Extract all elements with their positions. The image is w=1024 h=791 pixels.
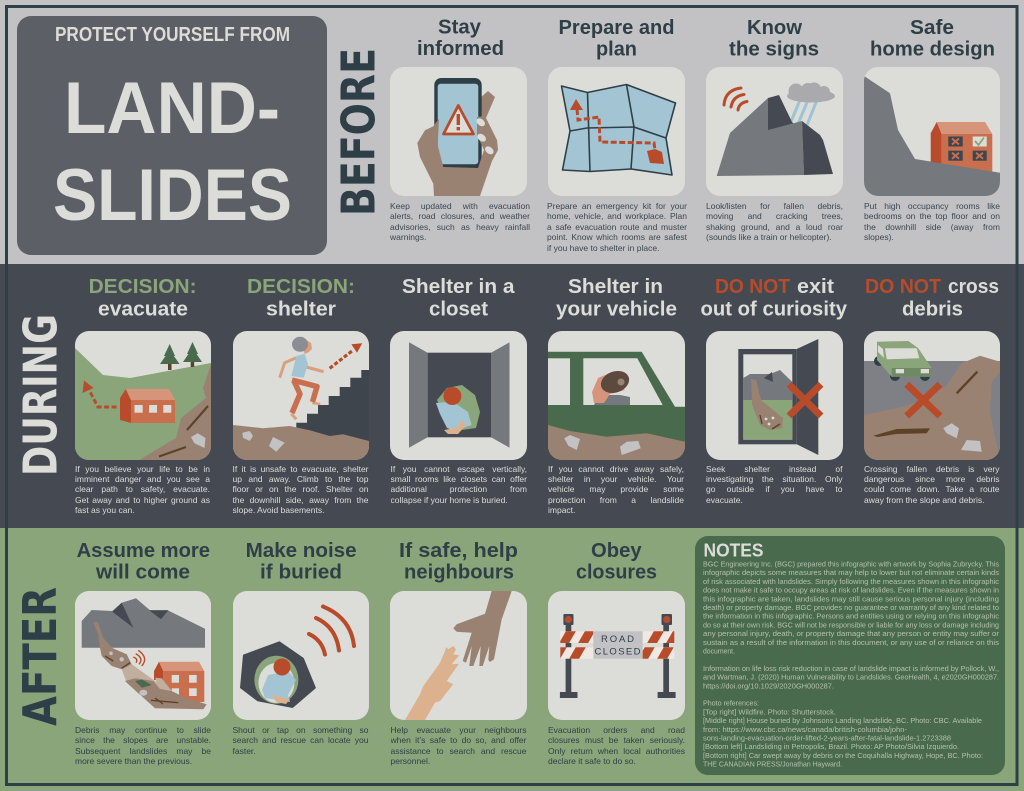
body text: imminent danger and you see a bbox=[75, 474, 210, 484]
heading: Assume more bbox=[77, 539, 210, 562]
icon: open door with crossed out debris view bbox=[706, 331, 843, 460]
heading: neighbours bbox=[404, 561, 514, 584]
body text: search and rescue can locate you bbox=[232, 735, 368, 745]
notes text: this infographic are taken, landslides may still cause serious personal injury (including bbox=[703, 594, 999, 603]
title block: LAND- bbox=[64, 68, 280, 149]
body text: collapse if your home is buried. bbox=[390, 495, 508, 505]
icon: road closed barricade: ROAD bbox=[601, 634, 634, 645]
heading bbox=[556, 275, 677, 320]
heading: DO NOT bbox=[715, 275, 790, 298]
section label: during: DURING bbox=[14, 314, 68, 476]
panel: after band bbox=[0, 528, 1024, 791]
body text: Prepare an emergency kit for your bbox=[547, 201, 687, 211]
icon: car stopped before debris with cross bbox=[864, 331, 1000, 460]
heading: debris bbox=[902, 298, 963, 320]
step: assume more will come bbox=[75, 539, 215, 775]
notes text: any personal injury, death, or property damage that any person or entity may suffer or bbox=[703, 629, 1000, 638]
body text bbox=[864, 464, 1004, 514]
step: safe home design bbox=[864, 16, 1004, 255]
body text: faster. bbox=[232, 746, 256, 756]
body text: more severe than the previous. bbox=[75, 756, 192, 766]
heading bbox=[402, 275, 515, 320]
body text: up and away. Climb to the top bbox=[232, 474, 368, 484]
body text: dangerous since more debris bbox=[864, 474, 1000, 484]
icon: hand holding phone with warning bbox=[390, 67, 527, 196]
heading: Make noise bbox=[246, 539, 357, 562]
heading: If safe, help bbox=[399, 539, 518, 562]
step: do not exit out of curiosity bbox=[700, 275, 848, 514]
body text: fast as you can. bbox=[75, 505, 135, 515]
body text: impact. bbox=[548, 505, 575, 515]
step: prepare and plan bbox=[547, 16, 687, 261]
notes text: death) or property damage. BGC provides no guarantee or warranty of any kind related to bbox=[703, 603, 999, 612]
body text: If you believe your life to be in bbox=[75, 464, 210, 474]
body text bbox=[75, 725, 215, 775]
title block: SLIDES bbox=[53, 155, 292, 236]
heading: will come bbox=[95, 561, 190, 584]
heading bbox=[77, 539, 210, 584]
body text bbox=[706, 464, 846, 514]
icon: person climbing stairs bbox=[233, 331, 369, 460]
body text: the downhill side (away from bbox=[864, 222, 1000, 232]
body text: declare it safe to do so. bbox=[548, 756, 636, 766]
heading: Shelter in a bbox=[402, 275, 515, 298]
body text: Keep updated with evacuation bbox=[390, 201, 530, 211]
body text: If you cannot drive away safely, bbox=[548, 464, 684, 474]
body text: Only return when local authorities bbox=[548, 746, 685, 756]
body text: (sounds like a train or helicopter). bbox=[706, 232, 832, 242]
body text: closures must be taken seriously. bbox=[548, 735, 685, 745]
panel: notes bbox=[695, 536, 1005, 775]
heading: evacuate bbox=[98, 298, 188, 320]
icon: house on slope bbox=[864, 67, 1000, 196]
step: decision shelter bbox=[232, 275, 372, 524]
notes text: BGC Engineering Inc. (BGC) prepared this infographic with artwork by Sophia Zubrycky. This bbox=[703, 560, 999, 568]
body text: Look/listen for fallen debris, bbox=[706, 201, 843, 211]
heading: Shelter in bbox=[568, 275, 663, 298]
section label: after: AFTER bbox=[13, 587, 67, 726]
body text bbox=[232, 464, 372, 524]
title block bbox=[17, 16, 327, 255]
body text: go outside if you have to bbox=[706, 484, 842, 494]
body text bbox=[232, 725, 372, 765]
notes text: sustain as a result of the information in this document, or any use of or reliance on this bbox=[703, 638, 999, 647]
body text: investigating the situation. Only bbox=[706, 474, 842, 484]
body text: away from the slope and debris. bbox=[864, 495, 984, 505]
body text: slope. Avoid basements. bbox=[232, 505, 324, 515]
body text: Help evacuate your neighbours bbox=[390, 725, 526, 735]
notes text: [Top right] Wildfire. Photo: Shutterstock. bbox=[703, 707, 836, 716]
step: do not cross debris bbox=[864, 275, 1004, 514]
heading: exit bbox=[797, 275, 834, 298]
notes text: the information in this infographic. Persons and entities using or relying on this infographic bbox=[703, 612, 999, 621]
heading: closet bbox=[429, 298, 488, 320]
notes text: document. bbox=[703, 646, 735, 656]
heading bbox=[246, 539, 357, 584]
step: make noise if buried bbox=[232, 539, 372, 765]
body text: Get away and to higher ground as bbox=[75, 495, 210, 505]
panel: during band bbox=[0, 264, 1024, 528]
body text bbox=[548, 725, 688, 775]
body text: could come down. Take a route bbox=[864, 484, 1000, 494]
notes text bbox=[703, 560, 1000, 769]
heading: if buried bbox=[260, 561, 342, 584]
body text bbox=[548, 464, 688, 524]
body text: the downhill side, away from the bbox=[232, 495, 368, 505]
notes text: of risk associated with landslides. Simply following the measures shown in this infographic bbox=[703, 577, 999, 586]
notes text: https://doi.org/10.1029/2020GH000287. bbox=[703, 681, 834, 690]
heading bbox=[576, 539, 657, 584]
section label: before: BEFORE bbox=[332, 48, 386, 216]
heading: Know bbox=[747, 16, 802, 39]
body text: evacuate. bbox=[706, 495, 743, 505]
notes text: and Wartman, J. (2020) Human Vulnerability to Landslides. GeoHealth, 4, e2020GH000287. bbox=[703, 673, 999, 682]
step: shelter in a closet bbox=[390, 275, 530, 514]
icon: mountain, rain cloud, sound arcs bbox=[706, 67, 843, 196]
heading bbox=[247, 275, 355, 320]
body text: small rooms like closets can offer bbox=[390, 474, 527, 484]
body text: personnel. bbox=[390, 756, 430, 766]
body text bbox=[390, 725, 530, 775]
heading bbox=[558, 16, 674, 60]
body text: additional protection from bbox=[390, 484, 527, 494]
body text: Debris may continue to slide bbox=[75, 725, 211, 735]
step: help neighbours bbox=[390, 539, 530, 775]
heading: DECISION: bbox=[247, 275, 355, 298]
heading: out of curiosity bbox=[700, 298, 848, 320]
notes text: from: https://www.cbc.ca/news/canada/british-columbia/john- bbox=[703, 725, 908, 734]
notes text: THE CANADIAN PRESS/Jonathan Hayward. bbox=[703, 760, 842, 769]
icon: folded map with route bbox=[548, 67, 685, 196]
icon: house, hill and evacuation arrow bbox=[75, 331, 211, 460]
heading bbox=[870, 16, 995, 60]
body text: If you cannot escape vertically, bbox=[390, 464, 527, 474]
body text bbox=[390, 464, 530, 514]
body text bbox=[864, 201, 1004, 255]
body text: moving and cracking trees, bbox=[706, 211, 843, 221]
icon: buried person and sound arcs bbox=[233, 591, 369, 720]
heading: the signs bbox=[729, 38, 819, 60]
icon: person crouched in vehicle bbox=[548, 331, 685, 460]
heading: shelter bbox=[266, 298, 336, 320]
heading: your vehicle bbox=[556, 298, 677, 320]
body text: protection from a landslide bbox=[548, 495, 684, 505]
title block: PROTECT YOURSELF FROM bbox=[55, 24, 290, 46]
notes text: [Bottom left] Landsliding in Petropolis, Brazil. Photo: AP Photo/Silvia Izquierdo. bbox=[703, 742, 959, 751]
heading: informed bbox=[417, 37, 504, 60]
step: decision evacuate bbox=[75, 275, 215, 524]
body text: point. Know which rooms are safest bbox=[547, 232, 687, 242]
body text: Evacuation orders and road bbox=[548, 725, 685, 735]
heading bbox=[417, 16, 504, 60]
body text: If it is unsafe to evacuate, shelter bbox=[232, 464, 368, 474]
heading bbox=[700, 275, 848, 320]
body text: alerts, road closures, and weather bbox=[390, 211, 530, 221]
notes text: [Bottom right] Car swept away by debris on the Coquihalla Highway, Hope, BC. Photo: bbox=[703, 751, 983, 760]
heading: Obey bbox=[591, 539, 642, 562]
heading: plan bbox=[596, 38, 637, 60]
body text: when it’s safe to do so, and offer bbox=[390, 735, 526, 745]
step: obey closures bbox=[548, 539, 688, 775]
body text: home, vehicle, and workplace. Plan bbox=[547, 211, 687, 221]
heading: DECISION: bbox=[89, 275, 197, 298]
step: stay informed bbox=[390, 16, 530, 255]
body text: vehicle may provide some bbox=[548, 484, 684, 494]
notes text: sons-landing-evacuation-order-lifted-2-years-after-fatal-landslide-1.2723388 bbox=[703, 734, 951, 742]
icon: two reaching hands bbox=[390, 591, 527, 720]
body text: since the slopes are unstable. bbox=[75, 735, 211, 745]
body text: if you have to shelter in place. bbox=[547, 243, 659, 253]
body text: warnings. bbox=[390, 232, 426, 242]
icon: road closed barricade bbox=[548, 591, 685, 720]
heading bbox=[729, 16, 819, 60]
heading bbox=[399, 539, 518, 584]
body text: slopes). bbox=[864, 232, 894, 242]
body text: Put high occupancy rooms like bbox=[864, 201, 1000, 211]
heading: Stay bbox=[438, 16, 482, 38]
heading: closures bbox=[576, 561, 657, 584]
body text bbox=[390, 201, 530, 255]
step: shelter in your vehicle bbox=[548, 275, 688, 524]
icon: mountain, landslide and house bbox=[75, 591, 211, 720]
body text: floor or on the roof. Shelter on bbox=[232, 484, 368, 494]
heading: DO NOT bbox=[865, 275, 941, 298]
heading bbox=[865, 275, 999, 320]
body text: assistance to search and rescue bbox=[390, 746, 526, 756]
body text: clear path to safety, evacuate. bbox=[75, 484, 210, 494]
body text: Subsequent landslides may be bbox=[75, 746, 211, 756]
notes text: Information on life loss risk reduction in case of landslide impact is informed by Pollock, W., bbox=[703, 664, 999, 673]
body text: shelter in your vehicle. Your bbox=[548, 474, 684, 484]
body text: shaking ground, and a loud roar bbox=[706, 222, 843, 232]
body text: a safe evacuation route and muster bbox=[547, 222, 687, 232]
notes heading: NOTES bbox=[704, 540, 764, 560]
notes text: [Middle right] House buried by Johnsons Landing landslide, BC. Photo: CBC. Available bbox=[703, 716, 982, 725]
heading: Prepare and bbox=[558, 16, 674, 39]
body text bbox=[547, 201, 687, 261]
heading: Safe bbox=[910, 16, 954, 39]
icon: road closed barricade: CLOSED bbox=[594, 647, 641, 658]
body text: Seek shelter instead of bbox=[706, 464, 842, 474]
body text: Shout or tap on something so bbox=[232, 725, 368, 735]
notes text: do so at their own risk. BGC will not be responsible or liable for any loss or damage including bbox=[703, 620, 999, 629]
body text: advisories, such as heavy rainfall bbox=[390, 222, 530, 232]
body text bbox=[75, 464, 215, 524]
heading: cross bbox=[948, 275, 999, 298]
icon: person curled in closet bbox=[390, 331, 527, 460]
notes text: Photo references: bbox=[703, 699, 759, 708]
body text bbox=[706, 201, 848, 255]
heading: home design bbox=[870, 38, 995, 60]
body text: Crossing fallen debris is very bbox=[864, 464, 1000, 474]
notes text: does not make it safe to occupy areas at risk of landslides. Even if the measures shown in bbox=[703, 586, 999, 595]
panel: before band bbox=[17, 16, 1000, 255]
body text: bedrooms on the top floor and on bbox=[864, 211, 1000, 221]
step: know the signs bbox=[706, 20, 843, 242]
heading bbox=[89, 275, 197, 320]
notes text: infographic depicts some measures that may help to lower but not eliminate certain kinds bbox=[703, 568, 999, 577]
